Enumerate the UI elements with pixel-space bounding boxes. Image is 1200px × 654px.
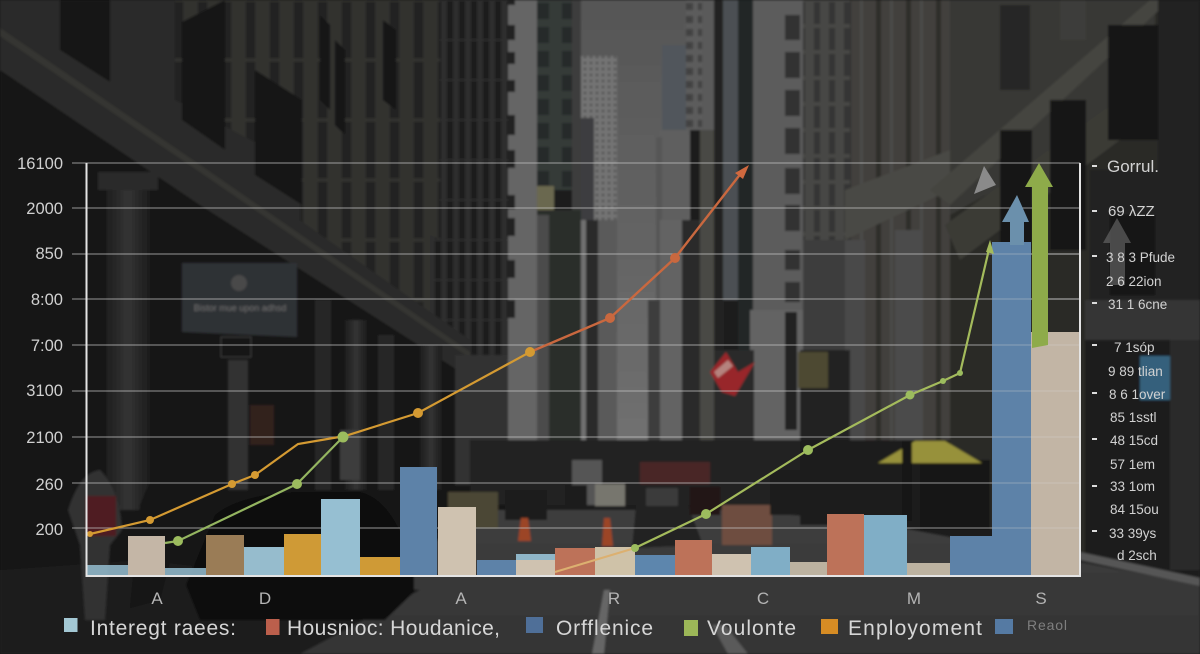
grey arrows (974, 166, 1131, 285)
category labels: R (608, 589, 620, 608)
traffic and storefront detail (470, 440, 810, 505)
category labels: A (455, 589, 467, 608)
right axis labels: Gorrul. (1107, 157, 1159, 176)
central towers (508, 0, 537, 470)
left building lower shadow and cornice (0, 65, 510, 610)
legend item: interest rates: Interegt raees: (90, 617, 236, 640)
bars (87, 242, 1080, 575)
legend (64, 617, 1067, 640)
left axis labels (17, 155, 63, 539)
left axis labels: 2000 (26, 200, 63, 218)
parked car (186, 492, 414, 620)
right axis labels: 84 15ou (1110, 502, 1159, 517)
legend item: volume: Voulonte (707, 617, 796, 640)
gridlines (72, 163, 1080, 528)
legend item: result: Reaol (1027, 617, 1067, 633)
background photo: city street canyon: Bistor mue upon adhsd (194, 303, 286, 313)
right axis labels: 69 λZZ (1108, 203, 1155, 220)
left axis labels: 8:00 (31, 291, 63, 309)
right axis labels (1106, 157, 1175, 563)
left axis labels: 260 (35, 476, 63, 494)
left axis labels: 2100 (26, 429, 63, 447)
right axis labels: 85 1sstl (1110, 410, 1157, 425)
right buildings (803, 0, 853, 240)
flag (710, 352, 755, 396)
right axis labels: 3 8 3 Pfude (1106, 250, 1175, 265)
right axis labels: 33 1om (1110, 479, 1155, 494)
legend item: orfflenice: Orfflenice (556, 617, 653, 640)
right axis labels: d 2sch (1117, 548, 1157, 563)
right axis labels: 33 39ys (1109, 526, 1157, 541)
legend item: housing: Housnioc: Houdanice, (287, 617, 500, 640)
left axis labels: 3100 (26, 382, 63, 400)
right axis labels: 9 89 tlian (1108, 364, 1163, 379)
right axis ticks (1092, 165, 1097, 532)
right axis labels: 48 15cd (1110, 433, 1158, 448)
right axis labels: 2 6 22ion (1106, 274, 1162, 289)
right axis labels: 7 1sóp (1114, 340, 1155, 355)
category labels: M (907, 589, 921, 608)
left axis labels: 200 (35, 521, 63, 539)
column and pillars (106, 190, 150, 510)
category labels (151, 589, 1047, 608)
category labels: S (1035, 589, 1047, 608)
left axis labels: 16100 (17, 155, 63, 173)
street (0, 510, 1200, 654)
right axis labels: 8 6 1over (1109, 387, 1166, 402)
category labels: D (259, 589, 271, 608)
pedestrians (68, 470, 122, 620)
legend item: employment: Enployoment (848, 617, 982, 640)
legend item: result (995, 617, 1067, 634)
category labels: A (151, 589, 163, 608)
right axis labels: 31 1 6cne (1108, 297, 1167, 312)
right axis labels: 57 1em (1110, 457, 1155, 472)
blue arrow (1002, 195, 1029, 245)
plot frame (86, 163, 1081, 577)
category labels: C (757, 589, 769, 608)
left building upper facade (0, 0, 508, 470)
left axis labels: 850 (35, 245, 63, 263)
left axis labels: 7:00 (31, 337, 63, 355)
green arrow (1025, 163, 1053, 348)
sky (575, 0, 690, 470)
green line: volume (165, 240, 994, 572)
orange line: employment (87, 165, 749, 537)
banner sign (182, 263, 297, 337)
